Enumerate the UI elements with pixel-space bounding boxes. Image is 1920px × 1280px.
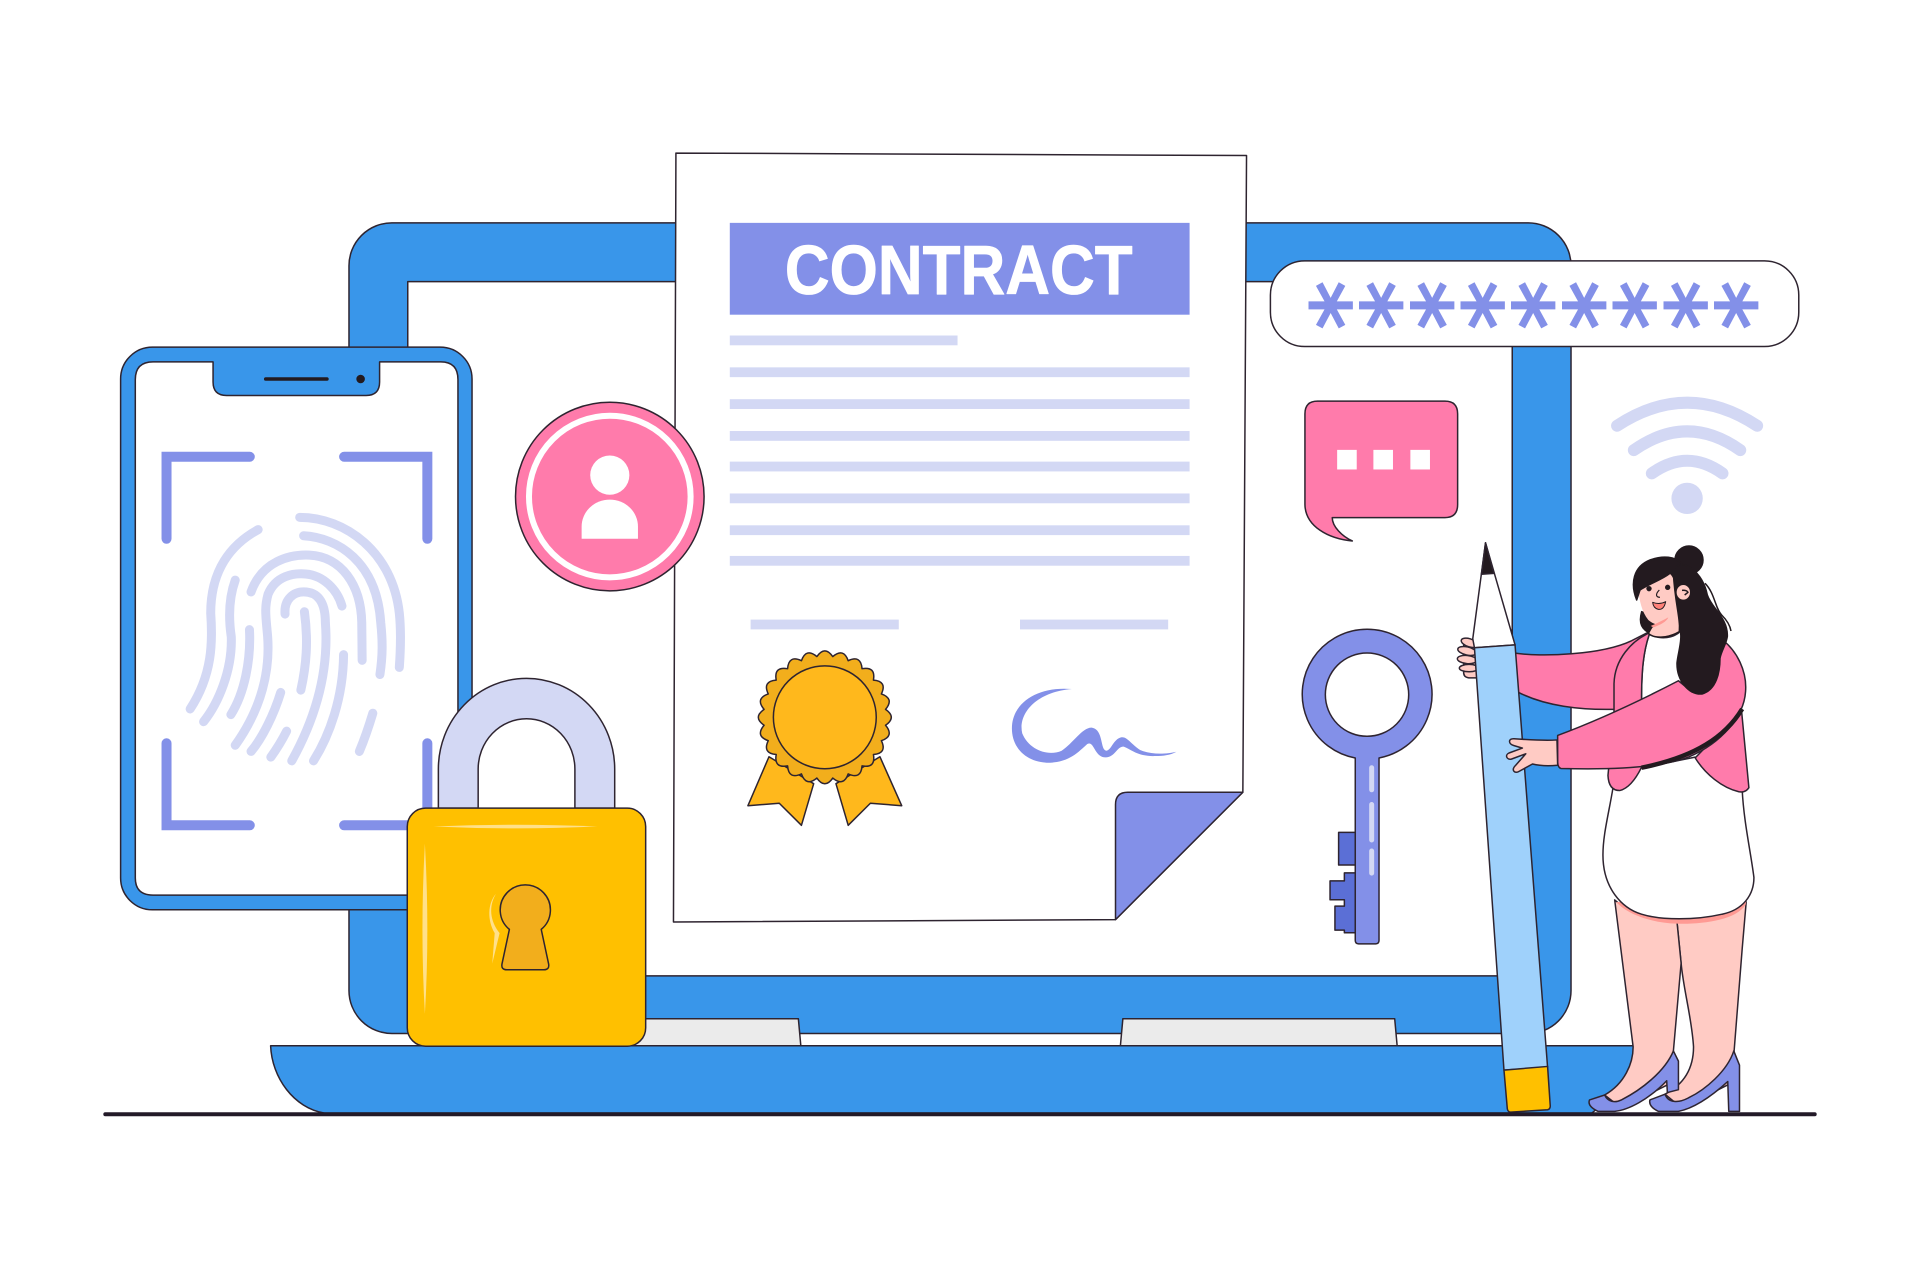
laptop screen frame <box>349 223 1571 1033</box>
hair bun <box>1675 546 1703 574</box>
signature <box>1012 689 1176 763</box>
eyes <box>1646 586 1652 591</box>
woman holding pencil <box>1457 543 1754 1112</box>
jacket right panel <box>1695 710 1749 792</box>
head and hair <box>1633 546 1731 694</box>
laptop <box>271 223 1635 1113</box>
chat bubble <box>1305 401 1458 541</box>
keyhole <box>500 885 550 970</box>
leg shadow <box>1616 902 1746 924</box>
fringe <box>1633 557 1682 600</box>
password field <box>1259 261 1799 347</box>
contract banner <box>730 223 1190 315</box>
lock shackle <box>438 678 615 808</box>
white top <box>1642 631 1682 702</box>
lock body <box>407 808 646 1046</box>
nose <box>1657 590 1660 597</box>
dress <box>1603 757 1754 919</box>
scan brackets <box>167 457 427 825</box>
pencil <box>1473 543 1550 1112</box>
jacket strap <box>1642 709 1742 768</box>
laptop base <box>271 1046 1635 1113</box>
document sheet <box>673 153 1247 922</box>
key teeth <box>1330 832 1355 933</box>
wifi icon <box>1617 403 1757 514</box>
legs <box>1605 900 1746 1108</box>
shoes <box>1589 1051 1739 1111</box>
back sleeve <box>1514 631 1650 709</box>
front sleeve <box>1558 640 1746 769</box>
phone screen <box>135 362 458 895</box>
phone speaker <box>266 377 327 381</box>
main hair <box>1673 565 1727 694</box>
jacket left panel <box>1608 633 1650 791</box>
face <box>1638 570 1683 626</box>
ground line <box>105 1112 1815 1116</box>
hair strand <box>1705 583 1731 631</box>
contract title: CONTRACT <box>785 231 1133 309</box>
contract document <box>673 153 1247 922</box>
laptop hinge right <box>1120 1019 1397 1046</box>
key shaft and ring <box>1302 629 1432 944</box>
hand on pencil back <box>1457 636 1479 678</box>
neck shadow <box>1651 617 1668 627</box>
lock highlights <box>422 825 598 1014</box>
phone <box>121 347 472 910</box>
chat dots <box>1337 450 1430 469</box>
key highlights <box>1369 768 1374 873</box>
password asterisks: ********* <box>1259 280 1776 330</box>
folded corner <box>1116 792 1243 920</box>
phone camera <box>356 375 365 383</box>
front hand <box>1507 739 1558 772</box>
back hair <box>1640 612 1657 634</box>
mouth <box>1653 602 1666 609</box>
fingerprint <box>190 517 401 761</box>
phone body <box>121 347 472 910</box>
medal seal <box>748 651 902 825</box>
user profile badge <box>516 402 704 591</box>
padlock <box>407 678 646 1046</box>
neck <box>1648 607 1680 637</box>
contract text lines <box>730 336 1190 629</box>
laptop hinge left <box>618 1019 801 1046</box>
ear <box>1677 585 1690 600</box>
key <box>1302 629 1432 944</box>
